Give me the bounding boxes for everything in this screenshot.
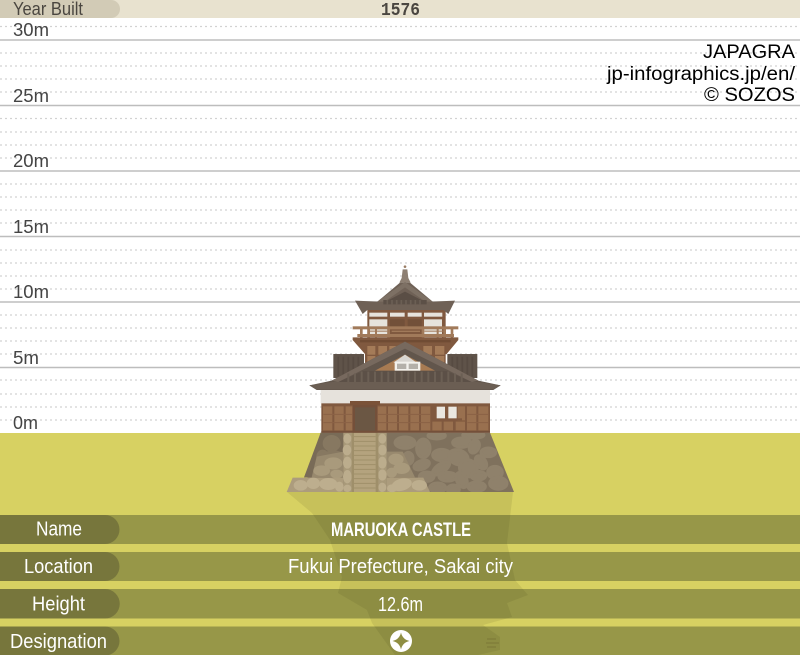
main gable roof xyxy=(309,342,501,390)
row labels: Designation xyxy=(10,631,107,653)
front steps xyxy=(287,478,343,492)
castle shadow reflected on ground xyxy=(287,492,528,655)
attribution: JAPAGRA xyxy=(703,42,795,63)
top roof xyxy=(355,283,455,314)
castle upper tiers and roofs xyxy=(309,265,501,390)
height axis labels: 10m xyxy=(13,282,49,302)
attribution xyxy=(606,42,796,106)
year built band xyxy=(0,0,800,21)
attribution: © SOZOS xyxy=(704,85,795,106)
icon: designation star xyxy=(390,630,412,652)
height axis labels: 30m xyxy=(13,20,49,40)
height axis labels xyxy=(13,20,49,433)
height axis labels: 20m xyxy=(13,151,49,171)
row values: Fukui Prefecture, Sakai city xyxy=(288,556,513,578)
row values: MARUOKA CASTLE xyxy=(331,520,471,541)
height axis labels: 25m xyxy=(13,86,49,106)
small shadow detail xyxy=(486,639,499,647)
height axis labels: 15m xyxy=(13,217,49,237)
row values: 12.6m xyxy=(378,594,423,616)
balcony railing xyxy=(353,326,458,338)
info rows xyxy=(0,515,800,655)
castle xyxy=(287,265,514,494)
row labels: Location xyxy=(24,556,93,578)
second tier skirt xyxy=(353,337,458,354)
inner bastion stones xyxy=(312,452,343,477)
row labels xyxy=(10,518,107,653)
side roofs xyxy=(333,354,364,378)
ground xyxy=(0,433,800,655)
height axis labels: 0m xyxy=(13,413,38,433)
stairs xyxy=(352,433,378,492)
year built band: 1576 xyxy=(381,1,420,21)
row labels: Name xyxy=(36,518,82,540)
left dark side xyxy=(304,433,343,477)
second tier wall xyxy=(365,343,446,364)
row label pills xyxy=(0,515,120,655)
row labels: Height xyxy=(32,594,85,616)
attribution: jp-infographics.jp/en/ xyxy=(606,64,796,85)
finial xyxy=(404,265,406,268)
row values xyxy=(288,520,513,616)
height axis labels: 5m xyxy=(13,348,39,368)
castle stone base xyxy=(287,387,514,494)
top floor wall xyxy=(367,309,446,341)
castle lower wall xyxy=(321,387,490,403)
staircase walls xyxy=(343,433,387,492)
